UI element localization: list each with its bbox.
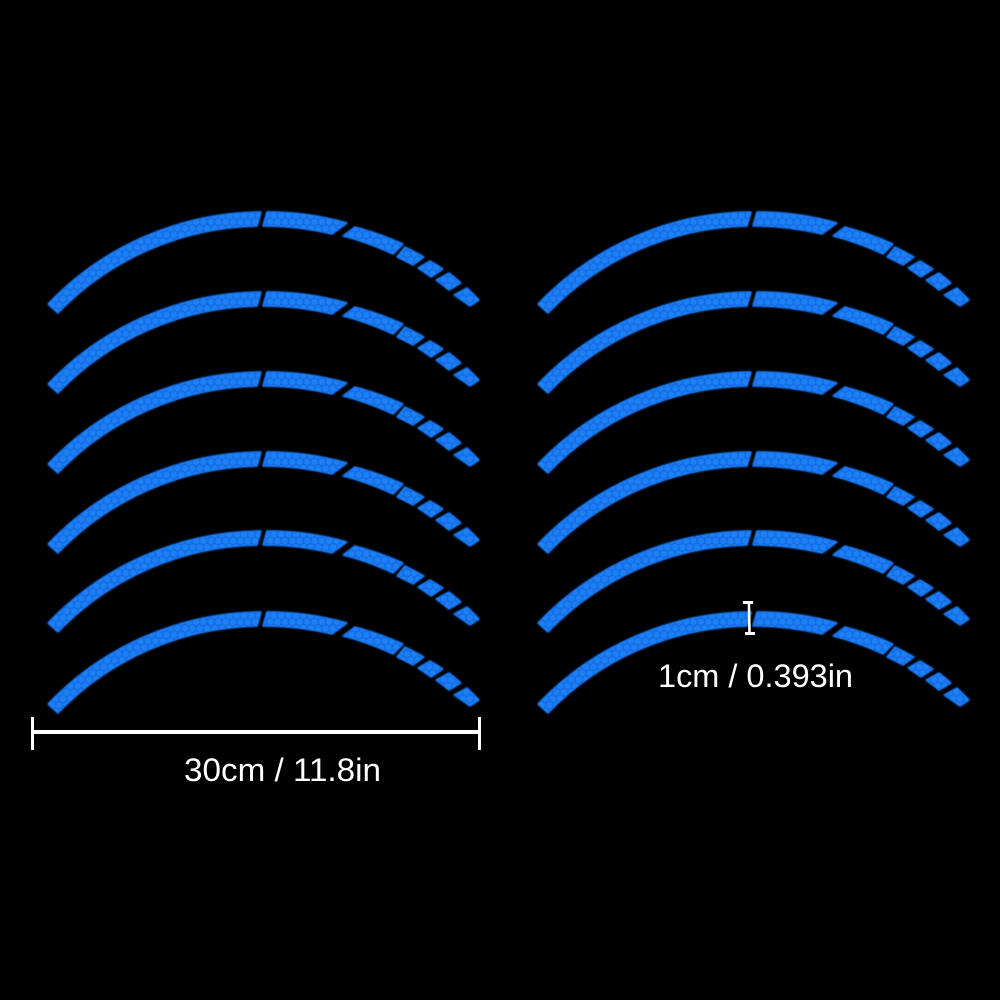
- strip 3 right: [538, 372, 969, 473]
- strip 6 right: [538, 612, 969, 713]
- strip 5 left: [48, 531, 479, 632]
- strip 5 right: [538, 531, 969, 632]
- height label: 1cm / 0.393in: [658, 658, 853, 694]
- strip 6 left: [48, 612, 479, 713]
- strip 3 left: [48, 372, 479, 473]
- strip 4 right: [538, 452, 969, 553]
- strip 2 right: [538, 292, 969, 393]
- strip 1 right: [538, 212, 969, 313]
- left set of reflective strips: [48, 212, 479, 713]
- strip 1 left: [48, 212, 479, 313]
- height marker: [743, 601, 755, 635]
- right set of reflective strips: [538, 212, 969, 713]
- width label: 30cm / 11.8in: [184, 752, 381, 788]
- width dimension bar: [31, 717, 481, 750]
- strip 2 left: [48, 292, 479, 393]
- strip 4 left: [48, 452, 479, 553]
